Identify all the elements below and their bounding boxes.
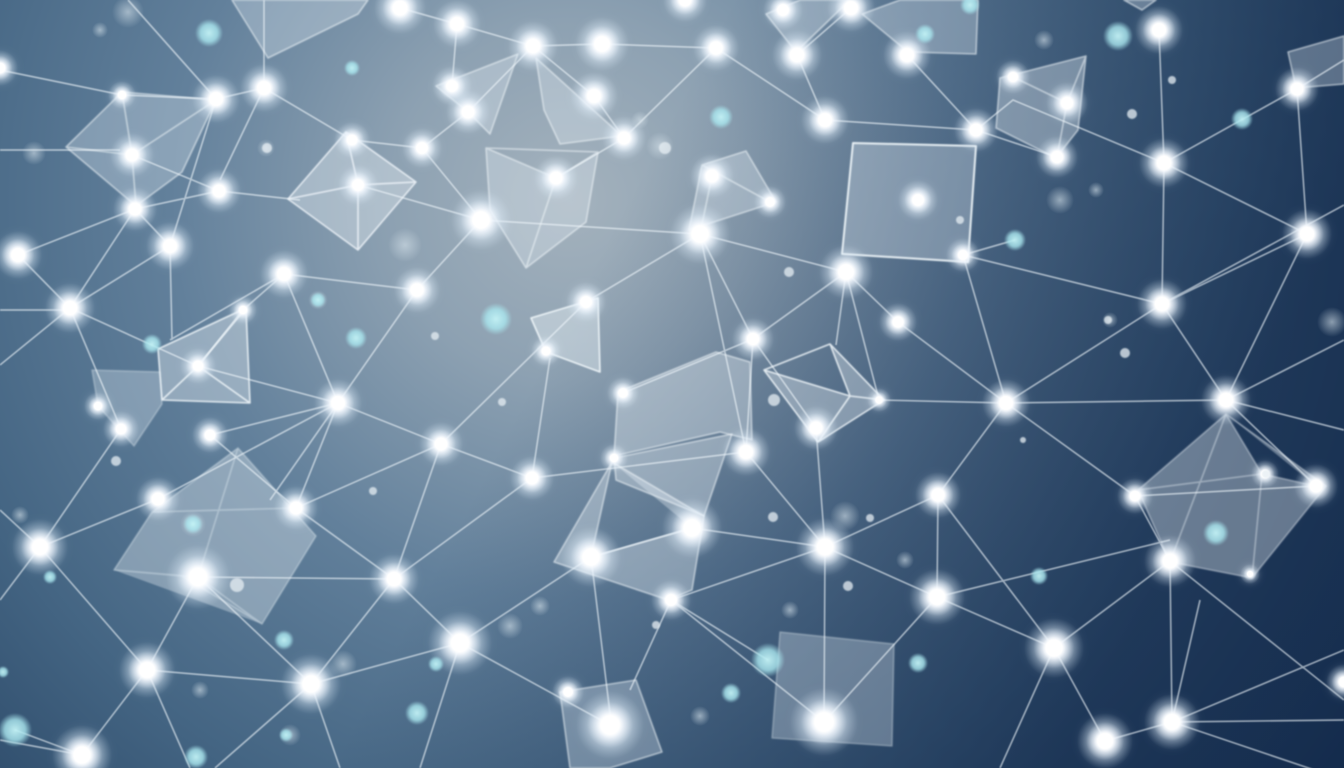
crystal: centre small bbox=[531, 298, 600, 372]
crystal: left mid bbox=[158, 308, 250, 403]
crystal: top right bbox=[766, 0, 850, 52]
crystal: centre large bbox=[614, 352, 752, 456]
crystal: top cut off bbox=[232, 0, 368, 58]
crystal: large square bbox=[842, 143, 976, 262]
crystal: top centre pair bbox=[436, 54, 518, 134]
crystal: lower left large bbox=[114, 448, 316, 624]
crystal: small diamond bbox=[288, 132, 416, 250]
crystal: right large bbox=[1138, 414, 1326, 578]
crystal: centre pentagon bbox=[486, 148, 598, 268]
crystal: tilted prism bbox=[764, 344, 884, 442]
crystal: small right of centre bbox=[689, 151, 776, 234]
crystal: bottom squares bbox=[560, 680, 662, 768]
crystal: lower centre bbox=[554, 462, 704, 600]
small white specks bbox=[111, 76, 1270, 629]
crystal: upper left bbox=[66, 92, 216, 206]
